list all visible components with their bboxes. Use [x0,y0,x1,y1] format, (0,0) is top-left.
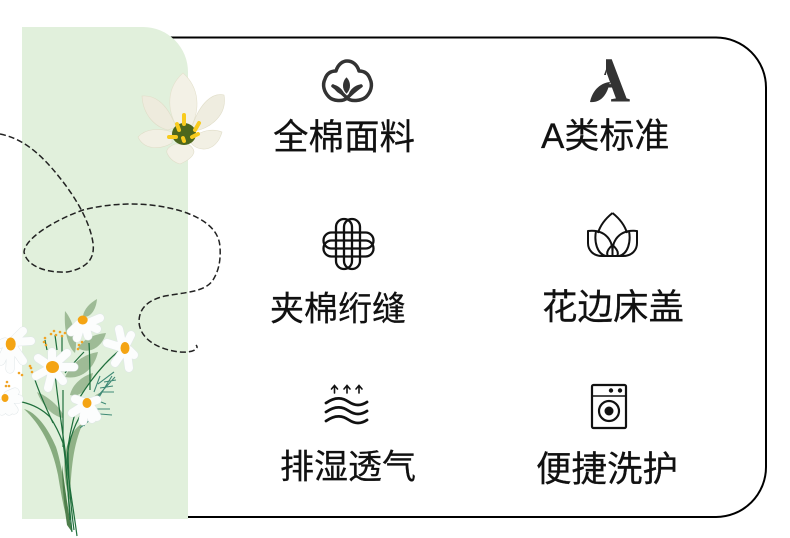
daisy heads [0,318,134,421]
icon: daisy bouquet [0,299,134,536]
label: 便捷洗护 [536,449,678,489]
icon: woven knot [324,219,374,269]
icon: serif A with leaf: A [584,44,630,116]
icon: lotus [588,213,637,256]
item: breathable [280,386,416,486]
item: quilted [270,219,406,328]
label: A类标准 [541,117,669,156]
item: easy wash [536,385,678,489]
label: 全棉面料 [273,117,415,157]
icon: moisture-wicking waves [326,386,367,423]
label: 夹棉绗缝 [270,290,406,328]
daisy centres [2,316,130,408]
label: 花边床盖 [542,287,684,327]
item: lace trim [542,213,684,327]
frame: rounded card outline [150,38,766,517]
leaves [37,299,106,418]
label: 排湿透气 [280,448,416,486]
icon: cotton boll [324,61,371,101]
stems [22,335,120,536]
long grass blades [24,409,71,530]
panel: green background [22,27,188,519]
icon: washing machine [592,385,626,428]
dashed flight path [0,134,220,352]
icon: white lily flower [138,73,224,164]
item: cotton [273,61,415,157]
dill sprig [80,372,116,428]
item: class A [540,59,668,151]
orange buds [5,330,83,387]
